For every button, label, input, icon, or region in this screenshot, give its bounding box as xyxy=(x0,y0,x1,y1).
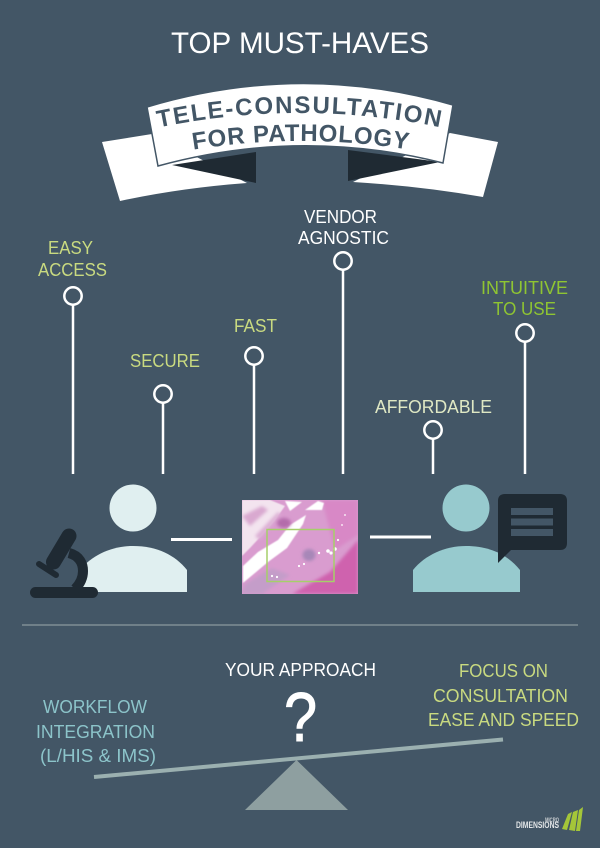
heading: your approach: YOUR APPROACH xyxy=(225,660,376,680)
icon: consultant person xyxy=(413,484,520,592)
pin: fast xyxy=(234,316,277,474)
icon: speech bubble xyxy=(498,494,567,563)
label: workflow integration: (L/HIS & IMS) xyxy=(40,746,156,766)
question mark: ? xyxy=(284,677,317,756)
ribbon main band xyxy=(147,83,453,166)
logo xyxy=(516,807,583,831)
pin: easy access xyxy=(38,238,107,474)
label: focus on consultation: EASE AND SPEED xyxy=(428,710,579,730)
ribbon right tail xyxy=(353,133,498,197)
pin: easy access: EASY xyxy=(48,238,93,258)
pin: secure xyxy=(130,351,200,474)
label: workflow integration: INTEGRATION xyxy=(36,722,155,742)
pin: easy access: ACCESS xyxy=(38,260,107,280)
pin: secure: SECURE xyxy=(130,351,200,371)
ribbon banner xyxy=(102,84,498,201)
ribbon left tail xyxy=(102,134,247,201)
label: focus on consultation: CONSULTATION xyxy=(433,686,568,706)
connector left xyxy=(171,538,232,541)
ribbon text line 1: TELE-CONSULTATION xyxy=(156,96,442,127)
pin: vendor agnostic xyxy=(298,207,389,474)
label: focus on consultation xyxy=(428,661,579,730)
region of interest box xyxy=(267,530,334,582)
icon: pathologist person xyxy=(80,484,187,592)
label: workflow integration xyxy=(36,697,156,766)
connector right xyxy=(370,536,431,538)
pin: vendor agnostic: VENDOR xyxy=(304,207,377,227)
logo: MICRO xyxy=(545,818,559,824)
pathology slide image xyxy=(242,500,358,594)
pin: intuitive to use: INTUITIVE xyxy=(481,278,568,298)
label: workflow integration: WORKFLOW xyxy=(43,697,147,717)
pin: affordable: AFFORDABLE xyxy=(375,397,492,417)
ribbon right fold xyxy=(348,150,440,181)
ribbon left fold xyxy=(172,152,256,183)
ribbon text line 2: FOR PATHOLOGY xyxy=(192,124,410,150)
pin: fast: FAST xyxy=(234,316,277,336)
logo: DIMENSIONS xyxy=(516,820,559,830)
icon: microscope xyxy=(36,536,92,592)
balance beam xyxy=(94,740,503,777)
label: focus on consultation: FOCUS ON xyxy=(459,661,548,681)
pin: affordable xyxy=(375,397,492,474)
balance fulcrum xyxy=(245,760,348,810)
pin: vendor agnostic: AGNOSTIC xyxy=(298,228,389,248)
pin: intuitive to use: TO USE xyxy=(493,299,556,319)
title: TOP MUST-HAVES xyxy=(171,27,429,60)
pin: intuitive to use xyxy=(481,278,568,474)
